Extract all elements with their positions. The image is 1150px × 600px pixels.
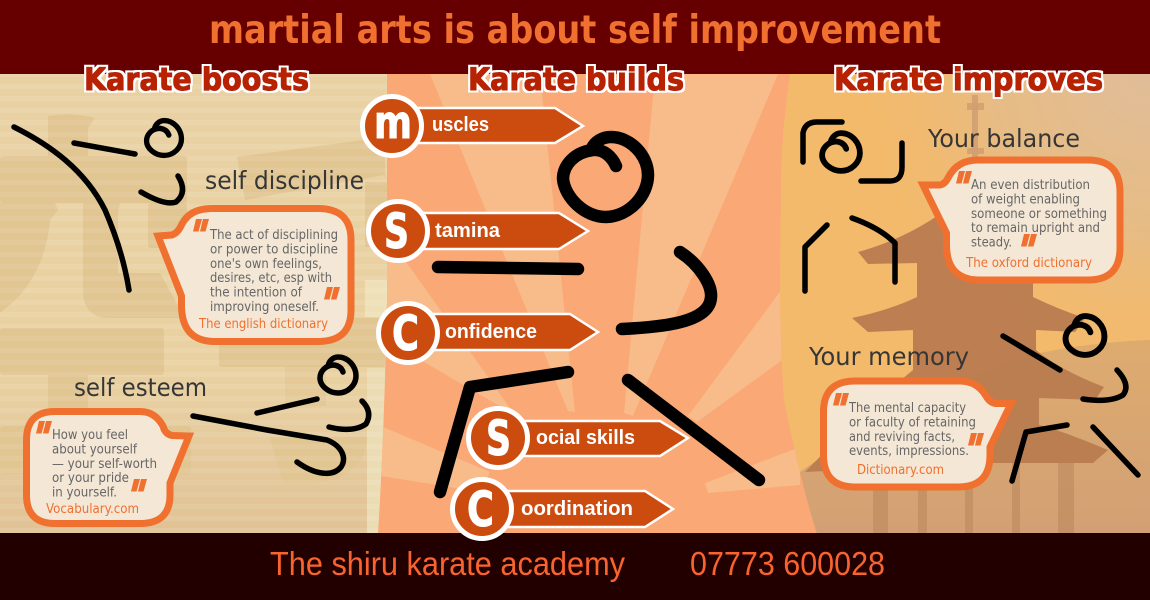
definition text: in yourself. bbox=[52, 486, 117, 501]
closing quote mark bbox=[131, 479, 147, 492]
pagoda spire bbox=[967, 95, 984, 165]
definition text: or your pride bbox=[52, 471, 129, 486]
badge: stamina bbox=[368, 202, 588, 260]
figure: high block pose (memory) bbox=[1003, 316, 1138, 481]
opening quote mark bbox=[956, 171, 972, 184]
footer academy name: The shiru karate academy bbox=[270, 545, 625, 582]
badge: social skills bbox=[468, 408, 688, 468]
badge: coordination bbox=[452, 480, 673, 538]
definition text: and reviving facts, bbox=[849, 430, 955, 445]
heading: Karate builds: Karate builds bbox=[468, 62, 684, 98]
badge: confidence: onfidence bbox=[445, 321, 537, 343]
subheading: self esteem: self esteem bbox=[74, 373, 207, 402]
source: The oxford dictionary bbox=[965, 255, 1092, 271]
pagoda body bbox=[805, 192, 1108, 472]
closing quote mark bbox=[968, 433, 984, 446]
definition text bbox=[52, 428, 157, 501]
definition text: The act of disciplining bbox=[209, 228, 338, 243]
badge: coordination: C bbox=[467, 482, 494, 538]
badge: muscles: m bbox=[374, 96, 412, 149]
badge: muscles: uscles bbox=[432, 114, 489, 136]
panel: right background with pagoda bbox=[776, 74, 1150, 534]
opening quote mark bbox=[36, 421, 52, 434]
closing quote mark bbox=[324, 287, 340, 300]
badge: social skills: S bbox=[486, 411, 511, 467]
closing quote mark bbox=[1021, 234, 1037, 246]
figure: side kick (self discipline) bbox=[14, 121, 183, 290]
callout: memory definition bbox=[824, 381, 1011, 487]
badge: stamina: tamina bbox=[435, 220, 501, 242]
definition text: desires, etc, esp with bbox=[210, 271, 332, 286]
source: Dictionary.com bbox=[857, 462, 944, 478]
panel: left background with kanji bbox=[0, 74, 392, 534]
badge: confidence: C bbox=[392, 306, 419, 362]
badge: coordination: oordination bbox=[521, 498, 633, 520]
figure: large karate stance bbox=[438, 137, 759, 492]
source: Vocabulary.com bbox=[46, 501, 139, 517]
subheading: Your balance: Your balance bbox=[927, 124, 1080, 153]
definition text: events, impressions. bbox=[849, 444, 969, 459]
definition text: someone or something bbox=[971, 207, 1107, 222]
definition text: An even distribution bbox=[971, 178, 1090, 193]
badge: social skills: ocial skills bbox=[536, 427, 635, 449]
definition text bbox=[848, 401, 976, 459]
badge: muscles bbox=[362, 96, 583, 156]
subheading: self discipline: self discipline bbox=[205, 166, 364, 195]
definition text: about yourself bbox=[52, 442, 137, 457]
definition text: one's own feelings, bbox=[210, 257, 322, 272]
footer bar bbox=[0, 533, 1150, 600]
definition text: or power to discipline bbox=[210, 242, 338, 257]
definition text: steady. bbox=[971, 236, 1012, 251]
definition text: — your self-worth bbox=[52, 457, 157, 472]
figure: balance pose bbox=[803, 122, 902, 291]
definition text: improving oneself. bbox=[210, 300, 319, 315]
footer phone number: 07773 600028 bbox=[690, 545, 885, 582]
heading: Karate improves: Karate improves bbox=[834, 62, 1103, 98]
title bar bbox=[0, 0, 1150, 74]
definition text: The mental capacity bbox=[848, 401, 966, 416]
badge: confidence bbox=[378, 304, 598, 362]
callout: balance definition bbox=[923, 160, 1120, 280]
callout: self discipline definition bbox=[158, 208, 351, 342]
definition text: of weight enabling bbox=[971, 192, 1080, 207]
callout: self esteem definition bbox=[26, 412, 189, 524]
definition text bbox=[209, 228, 338, 315]
opening quote mark bbox=[833, 393, 849, 406]
badge: stamina: S bbox=[384, 204, 409, 260]
panel: centre rays background bbox=[378, 74, 817, 534]
opening quote mark bbox=[193, 219, 209, 232]
heading: Karate boosts: Karate boosts bbox=[84, 62, 309, 98]
definition text: How you feel bbox=[52, 428, 128, 443]
definition text: or faculty of retaining bbox=[849, 415, 976, 430]
definition text: the intention of bbox=[210, 286, 302, 301]
definition text bbox=[971, 178, 1107, 251]
subheading: Your memory: Your memory bbox=[808, 342, 969, 371]
figure: low kick (self esteem) bbox=[193, 357, 369, 473]
definition text: to remain upright and bbox=[971, 221, 1100, 236]
source: The english dictionary bbox=[198, 316, 328, 332]
title: martial arts is about self improvement bbox=[209, 8, 941, 53]
